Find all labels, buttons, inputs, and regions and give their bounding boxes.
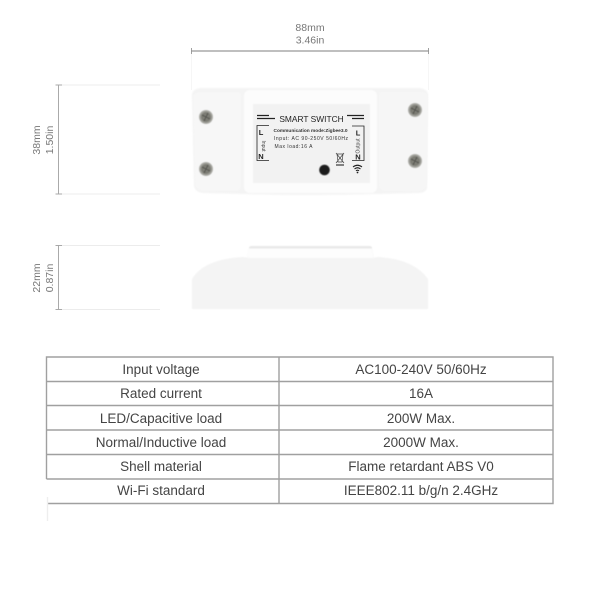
screw: top left bbox=[199, 110, 213, 124]
device front view bbox=[192, 88, 428, 195]
label specifications: Input: AC 90-250V 50/60Hz bbox=[274, 136, 348, 142]
row: shell material: Shell material bbox=[120, 459, 202, 474]
label specifications bbox=[274, 128, 348, 150]
row: rated current bbox=[120, 386, 433, 401]
device body bbox=[192, 88, 428, 195]
height dimension: 38mm 1.50in: 1.50in bbox=[44, 126, 56, 154]
width dimension: 88mm 3.46in: 3.46in bbox=[296, 34, 324, 46]
height dimension: 22mm 0.87in: 22mm bbox=[31, 263, 43, 293]
row: input voltage: Input voltage bbox=[122, 362, 200, 377]
row: LED capacitive load bbox=[100, 411, 455, 426]
input terminal marking: N bbox=[258, 152, 264, 161]
row: shell material: Flame retardant ABS V0 bbox=[348, 459, 494, 474]
row: normal inductive load: 2000W Max. bbox=[383, 435, 459, 450]
icon: crossed-out bin bbox=[336, 153, 344, 165]
height dimension: 38mm 1.50in bbox=[31, 85, 160, 194]
row: LED capacitive load: 200W Max. bbox=[387, 411, 455, 426]
input terminal marking bbox=[257, 126, 269, 161]
row: normal inductive load: Normal/Inductive load bbox=[96, 435, 226, 450]
screw: top right bbox=[408, 103, 422, 117]
input terminal marking: L bbox=[259, 128, 264, 137]
output terminal marking bbox=[352, 126, 364, 162]
icon: wifi bbox=[353, 165, 362, 173]
printed label bbox=[253, 104, 370, 183]
table grid bbox=[46, 357, 553, 521]
side view body bbox=[192, 257, 428, 309]
height dimension: 38mm 1.50in: 38mm bbox=[31, 125, 43, 155]
right mounting ear bbox=[379, 92, 428, 191]
row: normal inductive load bbox=[96, 435, 459, 450]
row: rated current: 16A bbox=[409, 386, 433, 401]
output terminal marking: Output bbox=[356, 138, 362, 154]
row: shell material bbox=[120, 459, 494, 474]
height dimension: 22mm 0.87in bbox=[31, 245, 160, 310]
side view top ridge bbox=[247, 246, 374, 258]
row: input voltage: AC100-240V 50/60Hz bbox=[355, 362, 487, 377]
output terminal marking: N bbox=[355, 152, 361, 162]
label title bbox=[257, 114, 364, 124]
raised centre bbox=[244, 90, 377, 193]
label specifications: Max load:16 A bbox=[274, 144, 313, 150]
left mounting ear bbox=[193, 92, 241, 191]
row: wi-fi standard: IEEE802.11 b/g/n 2.4GHz bbox=[344, 483, 498, 498]
row: LED capacitive load: LED/Capacitive load bbox=[100, 411, 222, 426]
row: rated current: Rated current bbox=[120, 386, 202, 401]
input terminal marking: Input bbox=[260, 140, 266, 152]
width dimension: 88mm 3.46in bbox=[192, 22, 428, 90]
height dimension: 22mm 0.87in: 0.87in bbox=[44, 264, 56, 292]
screw: bottom right bbox=[408, 154, 422, 168]
label specifications: Communication mode:Zigbee3.0 bbox=[274, 128, 348, 134]
row: wi-fi standard: Wi-Fi standard bbox=[117, 483, 205, 498]
device side view bbox=[192, 246, 428, 309]
label title: SMART SWITCH bbox=[279, 114, 344, 124]
icon: button bbox=[319, 165, 330, 175]
width dimension: 88mm 3.46in: 88mm bbox=[295, 22, 325, 34]
output terminal marking: L bbox=[356, 128, 361, 138]
specification table bbox=[46, 357, 553, 521]
row: wi-fi standard bbox=[117, 483, 498, 498]
screw: bottom left bbox=[199, 162, 213, 176]
row: input voltage bbox=[122, 362, 487, 377]
